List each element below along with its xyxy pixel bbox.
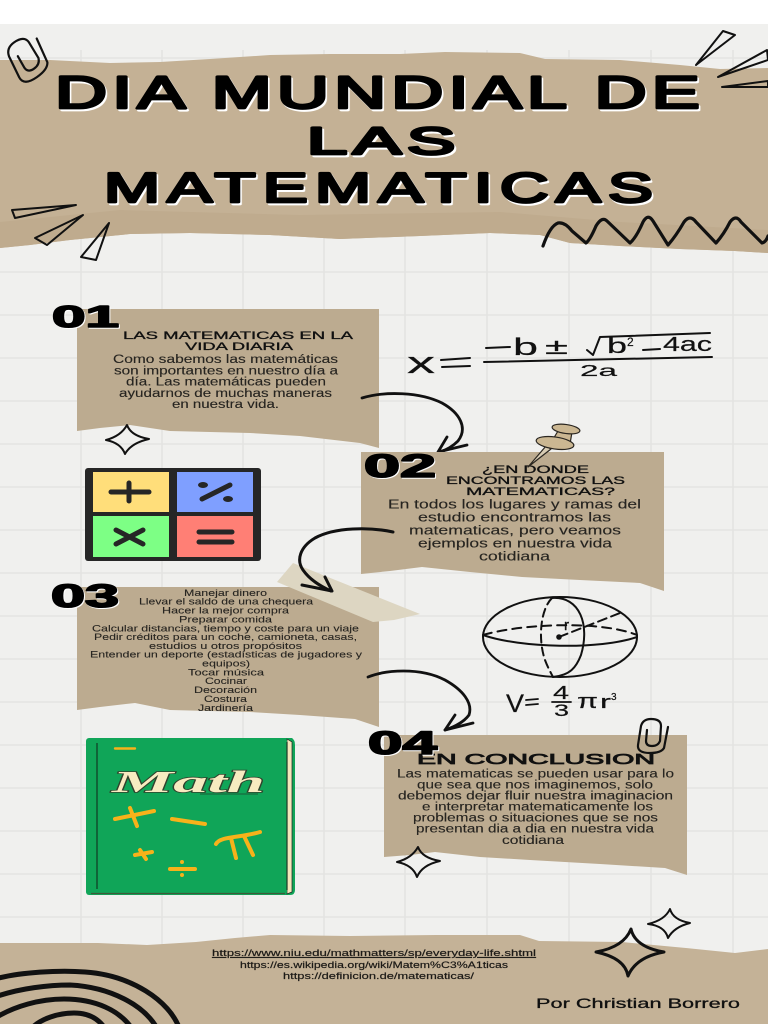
text 01: día. Las matemáticas pueden: [126, 376, 326, 388]
heading 02: MATEMATICAS?: [466, 486, 615, 498]
heading 02: ENCONTRAMOS LAS: [446, 475, 625, 487]
text 01: [113, 354, 339, 411]
arrow: 01 to 02: [362, 394, 467, 452]
text 04: [397, 768, 674, 847]
volume formula: π: [577, 691, 598, 713]
quadratic formula: b: [513, 334, 538, 361]
number 01: 01: [52, 299, 119, 334]
text 04: Las matematicas se pueden usar para lo: [397, 768, 674, 780]
text 03: Entender un deporte (estadísticas de jugadores y: [90, 650, 362, 660]
icon: concentric arcs: [0, 971, 180, 1024]
references: https://definicion.de/matematicas/: [283, 971, 474, 982]
heading 02: [446, 464, 625, 498]
text 04: debemos dejar fluir nuestra imaginacion: [398, 790, 673, 802]
text 03: Decoración: [194, 685, 257, 696]
volume formula: 3: [554, 701, 569, 720]
icon: small sparkle: [648, 909, 690, 938]
icon: spikes top right: [696, 31, 768, 87]
text 03: Preparar comida: [179, 614, 273, 626]
banner: torn paper header: [0, 52, 768, 253]
icon: large sparkle: [596, 929, 664, 976]
heading 02: ¿EN DONDE: [482, 464, 589, 476]
quadratic formula: ±: [545, 334, 568, 359]
text 03: [90, 588, 362, 714]
text 03: Cocinar: [205, 676, 248, 687]
text 01: son importantes en nuestro día a: [114, 366, 339, 378]
panel 02: [361, 452, 664, 591]
icon: paperclip panel 04: [638, 719, 668, 753]
volume formula: r: [600, 692, 611, 712]
icon: spikes left: [12, 205, 109, 260]
bottom band: torn paper: [0, 935, 768, 1024]
volume formula: V: [506, 690, 524, 718]
panel 04: [384, 735, 687, 875]
text 03: estudios u otros propósitos: [149, 641, 302, 652]
panel 03: [77, 587, 379, 727]
number 04: 04: [368, 725, 437, 761]
icon: zigzag line: [543, 217, 768, 246]
text 04: presentan dia a dia en nuestra vida: [416, 824, 655, 836]
heading 01: VIDA DIARIA: [185, 341, 294, 353]
icon: math book: Math: [110, 764, 265, 799]
icon: sparkle panel 04: [397, 847, 440, 877]
references: https://www.niu.edu/mathmatters/sp/everyday-life.shtml: [212, 948, 536, 959]
references: [212, 948, 536, 982]
text 03: Costura: [204, 694, 248, 705]
volume formula: [506, 683, 617, 720]
icon: math book: [86, 738, 295, 895]
text 04: que sea que nos imaginemos, solo: [417, 780, 653, 792]
text 03: Jardinería: [198, 703, 254, 714]
text 03: Pedir créditos para un coche, camioneta, casas,: [94, 632, 357, 643]
text 03: Hacer la mejor compra: [162, 606, 290, 616]
text 04: cotidiana: [502, 835, 565, 847]
text 02: estudio encontramos las: [418, 510, 612, 524]
heading 04: EN CONCLUSION: [417, 751, 655, 768]
quadratic formula: 4ac: [663, 334, 712, 356]
text 03: equipos): [202, 658, 250, 670]
heading 01: [123, 330, 354, 353]
text 01: en nuestra vida.: [172, 399, 279, 411]
volume formula: 4: [553, 683, 569, 703]
text 02: En todos los lugares y ramas del: [388, 496, 641, 512]
title: [55, 68, 700, 211]
number 02: 02: [364, 448, 436, 484]
icon: pushpin: [528, 423, 580, 467]
text 02: ejemplos en nuestra vida: [418, 536, 613, 550]
icon: sphere: [483, 597, 637, 677]
text 02: matematicas, pero veamos: [409, 522, 622, 538]
quadratic formula: 2a: [580, 363, 617, 380]
title: MATEMATICAS: [104, 164, 653, 211]
text 04: problemas o situaciones que se nos: [413, 812, 658, 824]
number 03: 03: [51, 578, 119, 614]
arrow: 02 to 03: [300, 529, 393, 591]
text 01: Como sabemos las matemáticas: [113, 354, 338, 366]
text 03: Manejar dinero: [184, 588, 267, 599]
text 02: [388, 496, 641, 564]
text 02: cotidiana: [479, 548, 551, 564]
author credit: Por Christian Borrero: [536, 995, 740, 1011]
panel 01: [77, 309, 379, 448]
icon: paperclip top left: [1, 31, 55, 86]
text 04: e interpretar matematicamente los: [422, 802, 653, 814]
arrow: 03 to 04: [368, 671, 473, 730]
icon: sparkle under panel 01: [106, 425, 149, 454]
icon: calculator: [85, 468, 261, 561]
heading 01: LAS MATEMATICAS EN LA: [123, 330, 354, 342]
quadratic formula: [407, 333, 712, 380]
references: https://es.wikipedia.org/wiki/Matem%C3%A1ticas: [240, 960, 508, 971]
title: DIA MUNDIAL DE: [55, 68, 700, 118]
title: LAS: [307, 120, 455, 163]
text 03: Calcular distancias, tiempo y coste para un viaje: [92, 624, 359, 634]
quadratic formula: b: [607, 335, 627, 358]
text 01: ayudarnos de muchas maneras: [119, 388, 332, 400]
tape: [277, 563, 420, 622]
quadratic formula: x: [407, 345, 436, 380]
text 03: Llevar el saldo de una chequera: [139, 596, 314, 608]
quadratic formula: 2: [627, 335, 634, 349]
icon: sphere: r: [564, 617, 569, 634]
volume formula: 3: [611, 692, 617, 703]
text 03: Tocar música: [188, 668, 265, 678]
